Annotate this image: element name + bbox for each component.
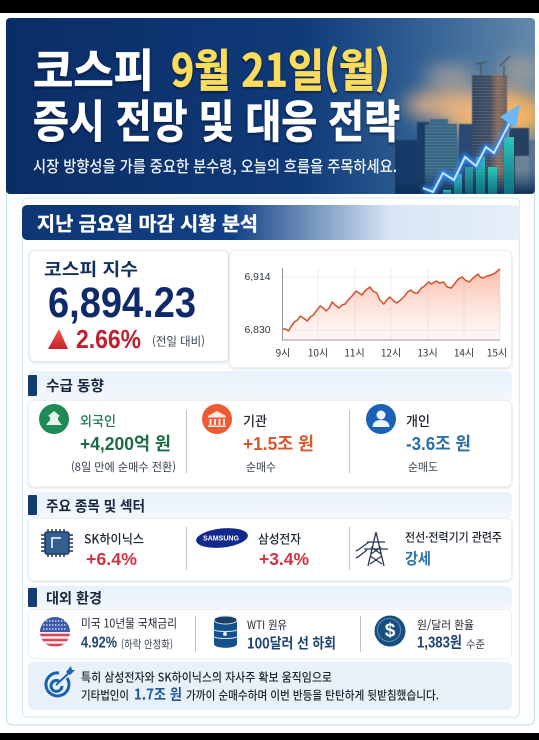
WTI crude bbox=[214, 616, 336, 654]
institutions: 기관 bbox=[243, 410, 267, 430]
WTI crude: WTI 원유 bbox=[247, 617, 287, 633]
US treasury yield: 4.92% bbox=[81, 634, 117, 652]
Samsung: SAMSUNG bbox=[203, 534, 239, 542]
foreign investors: +4,200억 원 bbox=[80, 434, 171, 454]
Samsung: +3.4% bbox=[259, 549, 309, 569]
rising arrow bbox=[423, 104, 520, 192]
transmission sector bbox=[356, 528, 502, 569]
panel: supply and demand bbox=[28, 400, 512, 486]
line chart: 15시 bbox=[487, 344, 507, 360]
title: 증시 전망 및 대응 전략 bbox=[33, 86, 400, 150]
section heading: external environment: 대외 환경 bbox=[46, 588, 102, 608]
panel: external environment bbox=[28, 610, 512, 658]
callout: 1.7조 원 bbox=[134, 684, 182, 704]
callout: 특히 삼성전자와 SK하이닉스의 자사주 확보 움직임으로 bbox=[81, 668, 332, 686]
section heading: major stocks and sectors bbox=[28, 492, 512, 519]
won dollar rate bbox=[374, 616, 485, 652]
individuals: 순매도 bbox=[408, 459, 438, 475]
WTI crude: 100달러 선 하회 bbox=[247, 632, 336, 654]
transmission sector: 전선·전력기기 관련주 bbox=[405, 528, 502, 546]
skyline bbox=[395, 56, 535, 194]
subtitle: 시장 방향성을 가를 중요한 분수령, 오늘의 흐름을 주목하세요. bbox=[33, 153, 397, 177]
title bbox=[33, 34, 400, 150]
Samsung bbox=[195, 526, 309, 569]
SK hynix: +6.4% bbox=[86, 549, 137, 569]
panel: main content bbox=[22, 198, 520, 717]
panel: KOSPI index: 2.66% bbox=[76, 324, 141, 354]
panel: KOSPI index bbox=[30, 250, 228, 362]
top black bar bbox=[0, 0, 539, 13]
SK hynix bbox=[41, 528, 144, 569]
won dollar rate: $ bbox=[385, 620, 396, 642]
panel: major stocks and sectors bbox=[28, 518, 512, 580]
institutions bbox=[202, 404, 314, 475]
section heading: external environment bbox=[28, 586, 512, 610]
US treasury yield: (하락 안정화) bbox=[121, 636, 173, 652]
callout: 가까이 순매수하며 이번 반등을 탄탄하게 뒷받침했습니다. bbox=[186, 686, 439, 704]
panel: KOSPI index: 6,894.23 bbox=[48, 279, 196, 327]
line chart: 9시 bbox=[276, 344, 290, 360]
line chart: 6,830 bbox=[244, 324, 271, 336]
won dollar rate: 원/달러 환율 bbox=[417, 617, 474, 633]
individuals bbox=[366, 404, 471, 475]
transmission sector: 강세 bbox=[405, 547, 431, 569]
SK hynix: SK하이닉스 bbox=[84, 528, 144, 548]
line chart: 11시 bbox=[344, 344, 365, 360]
Samsung: 삼성전자 bbox=[258, 528, 301, 548]
won dollar rate: 수준 bbox=[466, 636, 485, 652]
line chart: 14시 bbox=[454, 344, 474, 360]
won dollar rate: 1,383원 bbox=[417, 634, 462, 652]
line chart: 13시 bbox=[417, 344, 438, 360]
section heading: market review bbox=[22, 205, 520, 240]
teal growth bars bbox=[443, 137, 514, 194]
line chart: 12시 bbox=[381, 344, 401, 360]
section heading: supply and demand bbox=[28, 371, 512, 401]
icon: target bbox=[46, 666, 75, 696]
line chart: 10시 bbox=[308, 344, 328, 360]
section heading: supply and demand: 수급 동향 bbox=[46, 375, 104, 396]
sunset sky bbox=[405, 58, 539, 141]
section heading: market review: 지난 금요일 마감 시황 분석 bbox=[37, 208, 258, 236]
institutions: +1.5조 원 bbox=[243, 434, 314, 454]
line chart: 6,914 bbox=[244, 271, 271, 283]
header banner bbox=[6, 18, 539, 194]
individuals: -3.6조 원 bbox=[406, 434, 471, 454]
individuals: 개인 bbox=[406, 410, 430, 430]
line chart bbox=[230, 250, 512, 368]
title: 9월 21일(월) bbox=[171, 34, 390, 100]
panel: KOSPI index: 코스피 지수 bbox=[44, 256, 138, 282]
institutions: 순매수 bbox=[246, 459, 276, 475]
callout: 기타법인이 bbox=[81, 686, 129, 704]
foreign investors: (8일 만에 순매수 전환) bbox=[71, 459, 176, 475]
section heading: major stocks and sectors: 주요 종목 및 섹터 bbox=[46, 496, 145, 516]
bottom black bar bbox=[0, 733, 539, 740]
foreign investors: 외국인 bbox=[80, 410, 116, 430]
title: 코스피 bbox=[33, 34, 154, 100]
foreign investors bbox=[39, 404, 176, 475]
callout bbox=[28, 662, 512, 710]
panel: KOSPI index: (전일 대비) bbox=[152, 332, 205, 350]
US treasury yield bbox=[40, 617, 176, 650]
US treasury yield: 미국 10년물 국채금리 bbox=[81, 614, 177, 632]
